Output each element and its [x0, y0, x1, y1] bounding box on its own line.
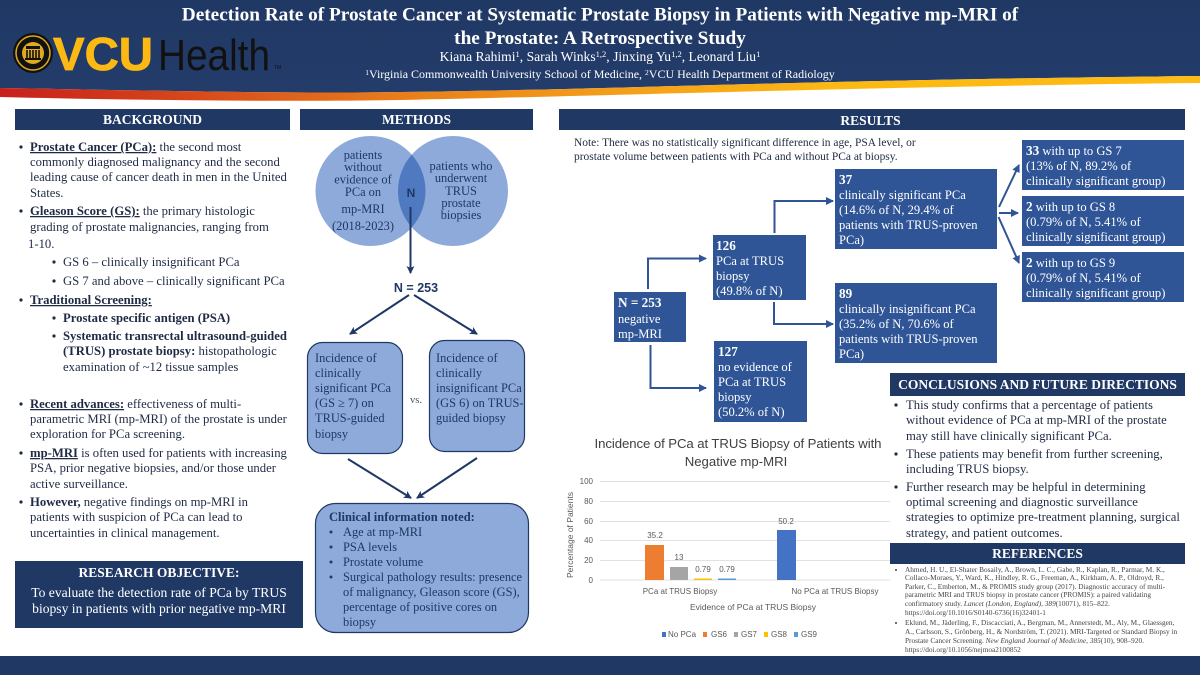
box: 2 GS8 — [1022, 196, 1184, 246]
affiliations: Virginia Commonwealth University School of Medicine, — [369, 67, 645, 81]
venn diagram: (2018-2023) — [332, 219, 394, 233]
x axis labels: No PCa at TRUS Biopsy — [792, 587, 878, 596]
box: clinically insignificant — [430, 340, 524, 452]
box: clinically insignificant: clinically — [436, 366, 483, 380]
heading: results — [559, 109, 1185, 130]
box: 126 PCa: 126 — [716, 238, 736, 253]
background text: parametric MRI (mp-MRI) of the prostate is under — [30, 412, 288, 426]
y axis labels — [580, 477, 594, 585]
box: N = 253: negative — [618, 312, 661, 326]
box: 127 no PCa — [714, 341, 807, 422]
box: clinical information: Surgical pathology results: presence — [343, 570, 523, 584]
box: 89 insignificant: 89 — [839, 286, 853, 301]
flowchart — [614, 140, 1184, 422]
venn diagram: evidence of — [334, 172, 393, 186]
conclusions text: strategies to optimize pre-treatment planning, surgical — [906, 510, 1180, 524]
icon: VCU seal — [13, 33, 53, 73]
conclusions text: without evidence of PCa at mp-MRI of the prostate — [906, 413, 1167, 427]
conclusions text: Further research may be helpful in determining — [906, 480, 1146, 494]
venn diagram: mp-MRI — [341, 202, 385, 216]
references text: Parker, C., Emberton, M., & PROMIS study group (2017). Diagnostic accuracy of multi- — [905, 582, 1166, 591]
y axis labels: 20 — [584, 556, 594, 565]
background text: examination of ~12 tissue samples — [63, 360, 238, 374]
box: clinically insignificant: guided biopsy — [436, 411, 507, 425]
references text: confirmatory study. Lancet (London, England), 389(10071), 815–822. — [905, 599, 1110, 608]
legend: GS8 — [771, 630, 788, 639]
box: N = 253 — [614, 292, 686, 342]
box: clinically insignificant: insignificant PCa — [436, 381, 522, 395]
box: 2 GS8: 2 with up to GS 8 — [1026, 199, 1115, 214]
heading: background — [15, 109, 290, 130]
chart title — [594, 436, 882, 469]
box: clinically significant: significant PCa — [315, 381, 392, 395]
header banner — [0, 0, 1200, 101]
box: 33 GS7: 33 with up to GS 7 — [1026, 143, 1122, 158]
box: 127 no PCa: PCa at TRUS — [718, 375, 786, 389]
data labels — [647, 517, 794, 574]
venn diagram: prostate — [441, 196, 481, 210]
title — [182, 4, 1019, 49]
box: 2 GS9: clinically significant group) — [1026, 286, 1165, 300]
box: clinical information — [316, 504, 528, 632]
legend — [662, 630, 818, 639]
x axis labels: PCa at TRUS Biopsy — [643, 587, 717, 596]
data labels: 0.79 — [695, 565, 711, 574]
box: 126 PCa — [713, 235, 806, 300]
box: 33 GS7: (13% of N, 89.2% of — [1026, 159, 1132, 173]
background text: Gleason Score (GS): the primary histologic — [30, 204, 255, 218]
legend: No PCa — [668, 630, 697, 639]
bars — [645, 530, 796, 580]
authors: , Jinxing Yu — [606, 49, 671, 64]
background text: Prostate specific antigen (PSA) — [63, 311, 230, 325]
box: 89 insignificant: PCa) — [839, 347, 864, 361]
note: prostate volume between patients with PCa and without PCa at biopsy. — [574, 151, 898, 163]
background text: Systematic transrectal ultrasound-guided — [63, 329, 287, 343]
box: 127 no PCa: biopsy — [718, 390, 752, 404]
box: 126 PCa: PCa at TRUS — [716, 254, 784, 268]
callout: research objective — [15, 561, 303, 628]
conclusions text: may still have clinically significant PCa. — [906, 429, 1112, 443]
box: clinical information: Clinical information noted: — [329, 510, 475, 524]
logo: VCU Health: Health — [158, 31, 270, 80]
box: 37 significant: patients with TRUS-proven — [839, 218, 978, 232]
background text: uncertainties in clinical management. — [30, 526, 220, 540]
box: N = 253: N = 253 — [618, 295, 662, 310]
y axis labels: 60 — [584, 517, 594, 526]
affiliations: 1 — [365, 68, 369, 77]
box: clinically insignificant: (GS 6) on TRUS- — [436, 396, 524, 410]
authors: , Leonard Liu — [682, 49, 756, 64]
chart title: Negative mp-MRI — [685, 454, 787, 469]
authors: Kiana Rahimi — [440, 49, 516, 64]
box: 127 no PCa: (50.2% of N) — [718, 405, 785, 419]
logo: VCU Health: TM — [274, 65, 281, 71]
panel: background — [15, 109, 290, 540]
authors: 1 — [756, 49, 760, 59]
box: clinical information: of malignancy, Gleason score (GS), — [343, 585, 520, 599]
venn diagram: N — [407, 186, 415, 200]
references text: parametric MRI and TRUS biopsy in prostate cancer (PROMIS): a paired validating — [905, 590, 1151, 599]
affiliations: VCU Health Department of Radiology — [649, 67, 835, 81]
box: 37 significant: clinically significant PCa — [839, 188, 966, 202]
box: 126 PCa: (49.8% of N) — [716, 284, 783, 298]
box: 126 PCa: biopsy — [716, 269, 750, 283]
bar chart — [565, 436, 890, 639]
heading: references — [890, 543, 1185, 564]
background text: active surveillance. — [30, 477, 128, 491]
panel: conclusions — [890, 373, 1185, 540]
box: 2 GS9: (0.79% of N, 5.41% of — [1026, 271, 1141, 285]
heading: results: RESULTS — [840, 113, 901, 128]
box: 33 GS7 — [1022, 140, 1184, 190]
references text: Eklund, M., Jäderling, F., Discacciati, A., Bergman, M., Annerstedt, M., Aly, M., Glaessgen, — [905, 618, 1175, 627]
conclusions text: strategy, and patient outcomes. — [906, 526, 1063, 540]
background text — [19, 140, 288, 540]
background text: States. — [30, 186, 63, 200]
panel: results — [559, 109, 1185, 639]
legend: GS7 — [741, 630, 758, 639]
legend: GS6 — [711, 630, 728, 639]
y axis title: Percentage of Patients — [565, 492, 575, 578]
conclusions text — [894, 398, 1180, 540]
box: clinical information: percentage of positive cores on — [343, 600, 497, 614]
venn diagram — [316, 136, 508, 246]
y axis labels: 80 — [584, 497, 594, 506]
heading: background: BACKGROUND — [103, 112, 202, 127]
box: 33 GS7: clinically significant group) — [1026, 174, 1165, 188]
box: 127 no PCa: 127 — [718, 344, 738, 359]
box: 127 no PCa: no evidence of — [718, 360, 793, 374]
conclusions text: These patients may benefit from further screening, — [906, 447, 1163, 461]
venn diagram: PCa on — [345, 185, 381, 199]
callout: research objective: To evaluate the detection rate of PCa by TRUS — [31, 585, 287, 600]
box: 37 significant: 37 — [839, 172, 853, 187]
conclusions text: This study confirms that a percentage of patients — [906, 398, 1153, 412]
callout: research objective: RESEARCH OBJECTIVE: — [79, 565, 239, 580]
heading: references: REFERENCES — [992, 546, 1083, 561]
heading: methods: METHODS — [382, 112, 451, 127]
references text: Collaco-Moraes, Y., Ward, K., Hindley, R. G., Freeman, A., Kirkham, A. P., Oldroyd, R., — [905, 573, 1164, 582]
callout: research objective: biopsy in patients with prior negative mp-MRI — [32, 601, 286, 616]
background text: Prostate Cancer (PCa): the second most — [30, 140, 242, 154]
references text: https://doi.org/10.1016/S0140-6736(16)32401-1 — [905, 608, 1046, 617]
box: 89 insignificant: (35.2% of N, 70.6% of — [839, 317, 954, 331]
background text: commonly diagnosed malignancy and the second — [30, 155, 280, 169]
legend: GS9 — [801, 630, 818, 639]
background text: 1-10. — [28, 237, 54, 251]
arrow: left box to info — [348, 459, 411, 498]
chart title: Incidence of PCa at TRUS Biopsy of Patients with — [594, 436, 882, 451]
heading: conclusions — [890, 373, 1185, 396]
box: clinical information: Prostate volume — [343, 555, 424, 569]
box: 37 significant: (14.6% of N, 29.4% of — [839, 203, 954, 217]
background text: (TRUS) prostate biopsy: histopathologic — [63, 344, 277, 358]
background text: grading of prostate malignancies, ranging from — [30, 220, 269, 234]
authors: , Sarah Winks — [520, 49, 596, 64]
box: 89 insignificant: clinically insignificant PCa — [839, 302, 976, 316]
background text: patients with suspicion of PCa can lead to — [30, 510, 242, 524]
logo: VCU Health: VCU — [53, 28, 153, 80]
authors: 1,2 — [596, 49, 606, 59]
y axis labels: 40 — [584, 536, 594, 545]
label: vs.: vs. — [410, 395, 422, 406]
box: clinically significant — [308, 342, 402, 454]
references text: Prostate Cancer Screening. New England Journal of Medicine, 385(10), 908–920. — [905, 636, 1144, 645]
data labels: 35.2 — [647, 531, 663, 540]
y axis labels: 100 — [580, 477, 594, 486]
venn diagram: patients who — [430, 159, 492, 173]
venn diagram: patients — [344, 148, 382, 162]
title: the Prostate: A Retrospective Study — [454, 28, 746, 49]
box: clinically significant: biopsy — [315, 427, 349, 441]
venn diagram: without — [344, 160, 382, 174]
background text: mp-MRI is often used for patients with increasing — [30, 446, 288, 460]
box: clinical information: Age at mp-MRI — [343, 525, 422, 539]
arrow: to insignificant — [414, 295, 477, 334]
box: clinical information: biopsy — [343, 615, 377, 629]
conclusions text: optimal screening and diagnostic surveillance — [906, 495, 1138, 509]
panel: methods — [300, 109, 533, 632]
note: Note: There was no statistically significant difference in age, PSA level, or — [574, 137, 916, 149]
label: N = 253: N = 253 — [394, 281, 438, 295]
box: 2 GS8: (0.79% of N, 5.41% of — [1026, 215, 1141, 229]
x axis labels — [643, 587, 878, 612]
orange ribbon — [0, 76, 1200, 101]
footer bar — [0, 656, 1200, 675]
arrows — [648, 165, 1019, 388]
venn diagram: underwent — [435, 171, 488, 185]
box: clinically insignificant: Incidence of — [436, 351, 498, 365]
arrow: to significant — [350, 295, 409, 334]
box: clinically significant: TRUS-guided — [315, 411, 385, 425]
box: clinically significant: clinically — [315, 366, 362, 380]
venn diagram: TRUS — [445, 184, 477, 198]
background text: exploration for PCa screening. — [30, 427, 185, 441]
data labels: 0.79 — [719, 565, 735, 574]
box: 2 GS9 — [1022, 252, 1184, 302]
box: clinically significant: Incidence of — [315, 351, 377, 365]
box: 2 GS9: 2 with up to GS 9 — [1026, 255, 1115, 270]
background text: GS 7 and above – clinically significant PCa — [63, 274, 285, 288]
heading: conclusions: CONCLUSIONS AND FUTURE DIRECTIONS — [898, 377, 1177, 392]
data labels: 13 — [675, 553, 684, 562]
arrow: venn to N — [410, 207, 412, 273]
box: 37 significant — [835, 169, 997, 249]
arrow: right box to info — [417, 458, 477, 498]
data labels: 50.2 — [778, 517, 794, 526]
background text: However, negative findings on mp-MRI in — [30, 495, 249, 509]
references text — [895, 565, 1178, 654]
heading: methods — [300, 109, 533, 130]
references text: A., Carlsson, S., Grönberg, H., & Nordström, T. (2021). MRI-Targeted or Standard Biopsy in — [905, 627, 1178, 636]
affiliations: 2 — [645, 68, 649, 77]
title: Detection Rate of Prostate Cancer at Systematic Prostate Biopsy in Patients with Negative mp-MRI of — [182, 4, 1019, 26]
box: clinically significant: (GS ≥ 7) on — [315, 396, 374, 410]
box: 89 insignificant: patients with TRUS-proven — [839, 332, 978, 346]
panel: references — [890, 543, 1185, 654]
x axis labels: Evidence of PCa at TRUS Biopsy — [690, 602, 817, 612]
authors: 1,2 — [671, 49, 682, 59]
conclusions text: including TRUS biopsy. — [906, 462, 1029, 476]
y axis labels: 0 — [589, 576, 594, 585]
background text: Traditional Screening: — [30, 293, 152, 307]
background text: GS 6 – clinically insignificant PCa — [63, 255, 240, 269]
references text: Ahmed, H. U., El-Shater Bosaily, A., Brown, L. C., Gabe, R., Kaplan, R., Parmar, M. K., — [905, 565, 1165, 574]
box: 89 insignificant — [835, 283, 997, 363]
references text: https://doi.org/10.1056/nejmoa2100852 — [905, 645, 1021, 654]
gridlines and axis — [600, 482, 890, 580]
box: 2 GS8: clinically significant group) — [1026, 230, 1165, 244]
venn diagram: biopsies — [441, 208, 481, 222]
box: 37 significant: PCa) — [839, 233, 864, 247]
box: clinical information: PSA levels — [343, 540, 397, 554]
logo: VCU Health — [13, 28, 281, 80]
box: N = 253: mp-MRI — [618, 327, 662, 341]
authors: 1 — [516, 49, 520, 59]
background text: leading cause of cancer death in men in the United — [30, 170, 287, 184]
background text: PSA, prior negative biopsies, and/or those under — [30, 461, 277, 475]
background text: Recent advances: effectiveness of multi- — [30, 397, 241, 411]
note — [574, 137, 916, 163]
